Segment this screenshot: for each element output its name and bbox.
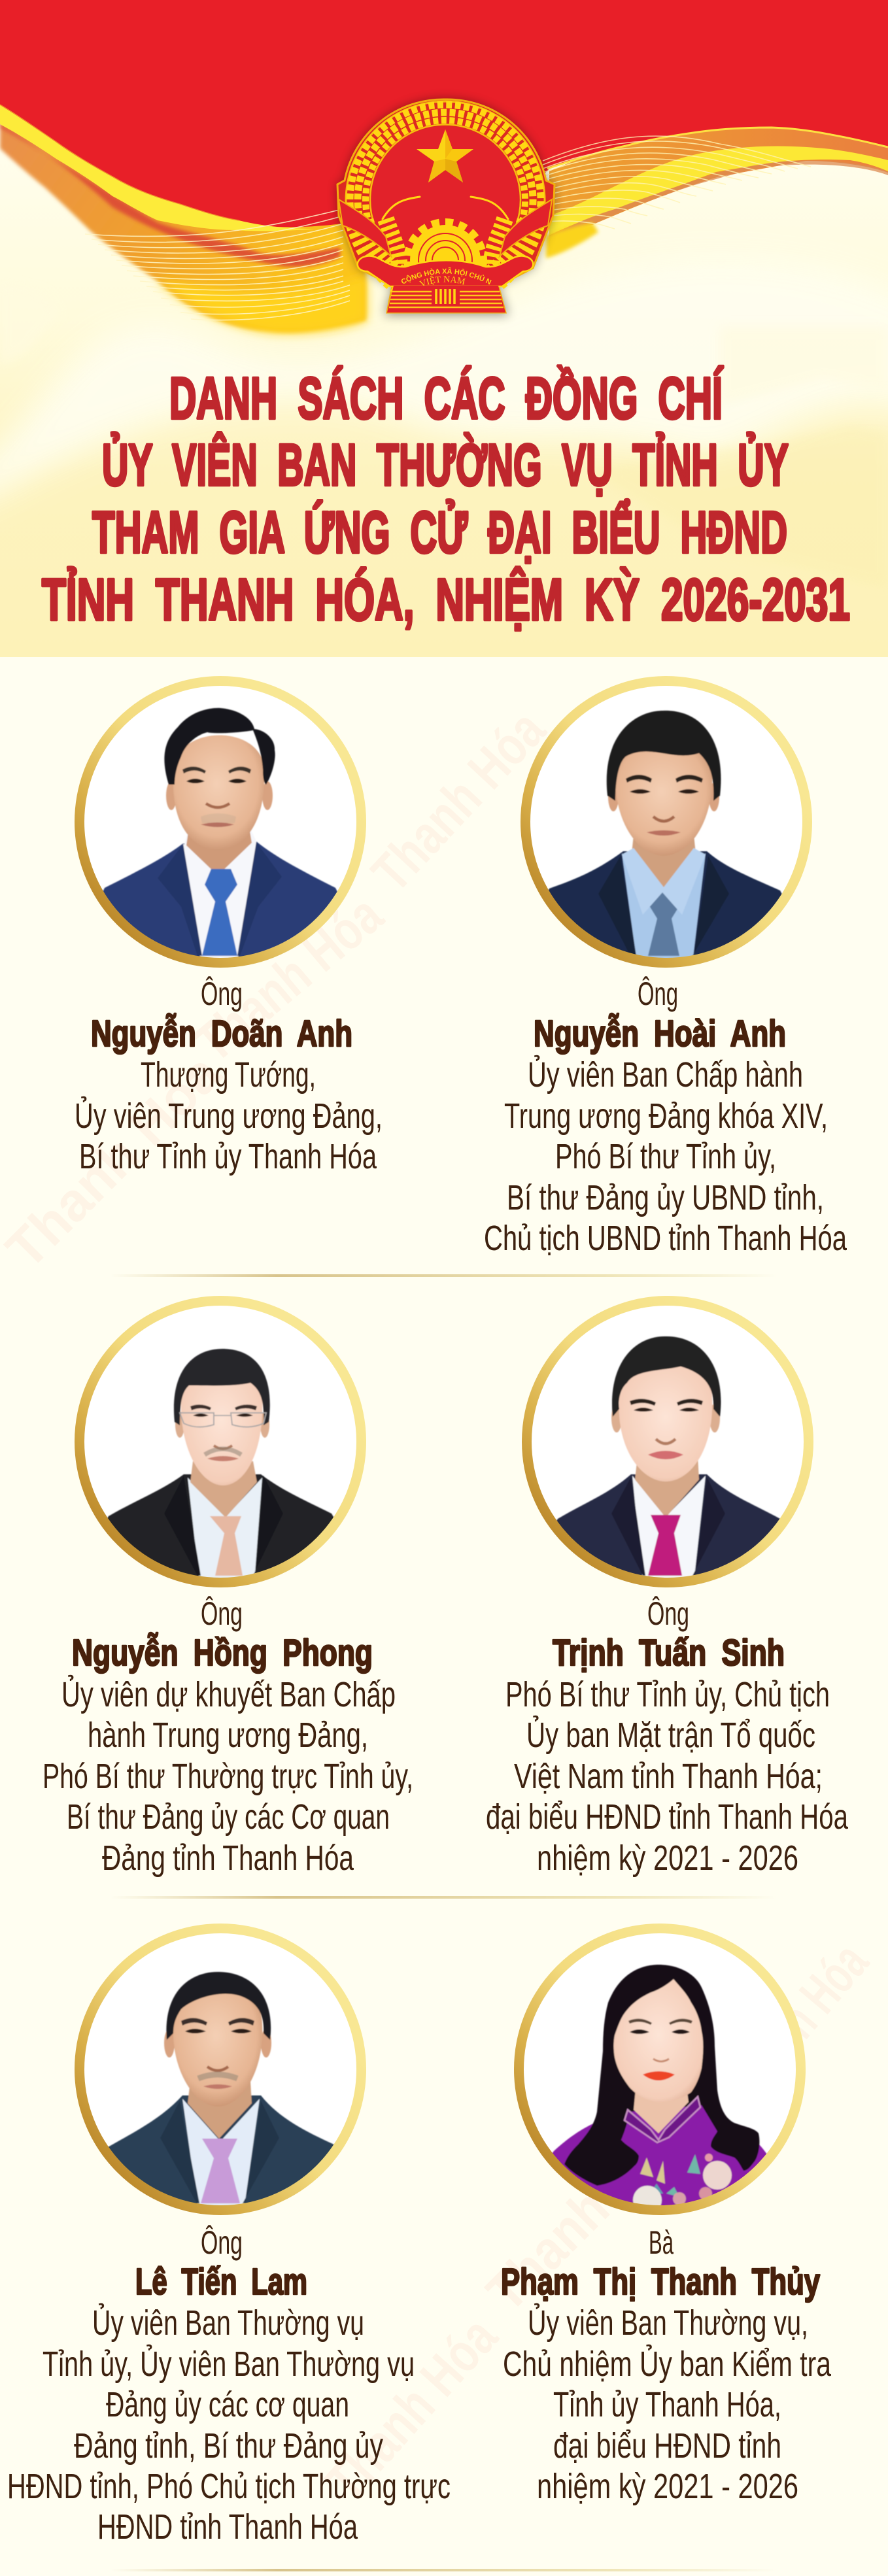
scroll banner — [357, 256, 534, 288]
panel: Trịnh Tuấn Sinh — [486, 1301, 849, 1878]
position — [484, 1055, 847, 1258]
portrait: Nguyễn Doãn Anh — [63, 681, 377, 972]
position: Phó Bí thư Thường trực Tỉnh ủy, — [43, 1757, 413, 1796]
emblem base — [387, 286, 505, 313]
honorific: Ông — [647, 1595, 689, 1632]
honorific: Ông — [638, 975, 678, 1012]
watermarks — [0, 698, 880, 2512]
portrait: Nguyễn Hồng Phong — [63, 1301, 377, 1592]
star — [417, 129, 473, 182]
name: Nguyễn Hoài Anh — [534, 1013, 786, 1055]
position: Đảng tỉnh Thanh Hóa — [102, 1839, 354, 1878]
position — [503, 2303, 832, 2506]
position: đại biểu HĐND tỉnh — [553, 2426, 781, 2466]
panel: Nguyễn Doãn Anh — [63, 681, 383, 1176]
position: hành Trung ương Đảng, — [88, 1716, 368, 1755]
watermarks: Thanh Hóa — [315, 2305, 509, 2512]
scroll banner: CỘNG HÒA XÃ HỘI CHỦ NGHĨA — [401, 267, 492, 285]
position: HĐND tỉnh, Phó Chủ tịch Thường trực — [7, 2467, 451, 2506]
watermarks: Thanh Hóa — [184, 883, 394, 1074]
gear — [403, 218, 487, 266]
panel: Lê Tiến Lam — [7, 1929, 451, 2547]
position — [43, 1675, 413, 1878]
ribbons — [339, 199, 552, 256]
title — [42, 365, 850, 633]
position: Bí thư Đảng ủy các Cơ quan — [67, 1797, 390, 1837]
national emblem — [331, 93, 561, 322]
wheat wreath — [346, 101, 545, 226]
position: Bí thư Tỉnh ủy Thanh Hóa — [79, 1137, 377, 1176]
right flowing lines — [543, 136, 811, 229]
portrait: Phạm Thị Thanh Thủy — [503, 1929, 817, 2220]
panel: Phạm Thị Thanh Thủy — [501, 1929, 832, 2506]
watermarks: Thanh Hóa — [360, 698, 557, 903]
name: Nguyễn Hồng Phong — [72, 1632, 373, 1674]
position: Ủy viên dự khuyết Ban Chấp — [61, 1675, 396, 1714]
position: Ủy viên Ban Thường vụ — [92, 2303, 364, 2343]
scroll banner: VIỆT NAM — [419, 276, 466, 286]
portrait: Nguyễn Hoài Anh — [509, 681, 823, 972]
portrait: Trịnh Tuấn Sinh — [511, 1301, 825, 1592]
position: Phó Bí thư Tỉnh ủy, — [555, 1137, 776, 1176]
watermarks: Thanh Hóa — [0, 1042, 233, 1280]
honorific: Bà — [649, 2224, 674, 2261]
honorific: Ông — [201, 1595, 243, 1632]
honorific: Ông — [201, 2224, 243, 2261]
position — [486, 1675, 849, 1878]
position: Đảng tỉnh, Bí thư Đảng ủy — [74, 2426, 383, 2466]
honorific: Ông — [201, 975, 243, 1012]
position: Tỉnh ủy, Ủy viên Ban Thường vụ — [43, 2345, 415, 2384]
position: nhiệm kỳ 2021 - 2026 — [537, 1839, 798, 1878]
position: HĐND tỉnh Thanh Hóa — [97, 2507, 358, 2547]
watermarks: Thanh Hóa — [475, 2103, 694, 2323]
position — [7, 2303, 451, 2547]
position: Đảng ủy các cơ quan — [106, 2385, 349, 2424]
position: Thượng Tướng, — [141, 1055, 316, 1094]
dress embroidery — [632, 2152, 732, 2205]
panel: Nguyễn Hồng Phong — [43, 1301, 413, 1878]
position: nhiệm kỳ 2021 - 2026 — [537, 2467, 798, 2506]
header background with red flag wave — [0, 0, 888, 657]
position — [75, 1055, 383, 1176]
name: Trịnh Tuấn Sinh — [553, 1632, 785, 1674]
left flowing lines — [85, 209, 350, 320]
portrait: Lê Tiến Lam — [63, 1929, 377, 2220]
position: Tỉnh ủy Thanh Hóa, — [553, 2385, 781, 2424]
panel: Nguyễn Hoài Anh — [484, 681, 847, 1258]
position: Ủy viên Trung ương Đảng, — [75, 1096, 383, 1136]
rice sheaves — [360, 197, 531, 281]
inner red field — [371, 126, 519, 274]
name: Nguyễn Doãn Anh — [91, 1013, 352, 1055]
name: Lê Tiến Lam — [135, 2261, 307, 2303]
